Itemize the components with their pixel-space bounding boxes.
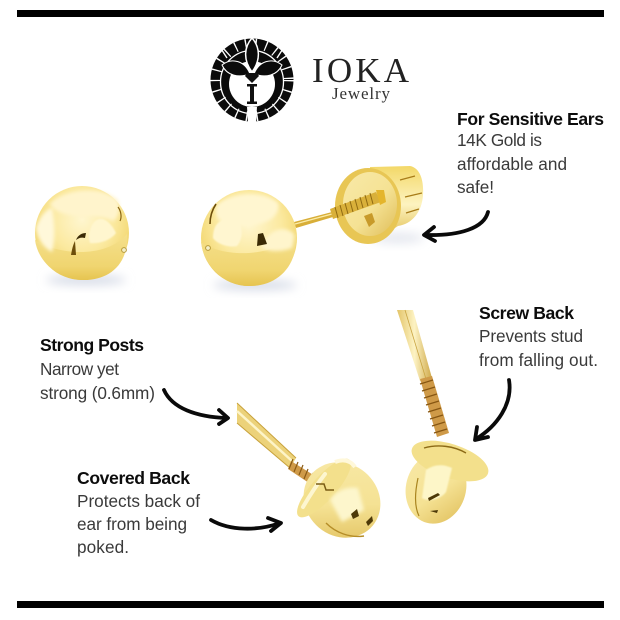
callout: covered back: Protects back of	[77, 491, 200, 511]
arrow to covered back	[211, 518, 281, 531]
callout: for sensitive ears: 14K Gold is	[457, 130, 542, 150]
screw thread	[330, 192, 381, 219]
callout: for sensitive ears: safe!	[457, 177, 494, 197]
top border bar	[17, 10, 604, 17]
back disc	[335, 168, 401, 244]
gold ball stud with screw back, side view	[201, 166, 424, 290]
callout: screw back: Screw Back	[479, 303, 574, 323]
callout: for sensitive ears	[457, 109, 604, 197]
loose screw back with post, lower left	[237, 403, 396, 553]
arrow to screw back disc	[424, 212, 488, 241]
callout: covered back	[77, 468, 200, 557]
callout: strong posts: Strong Posts	[40, 335, 144, 355]
logo wordmark: Jewelry	[332, 84, 390, 103]
ball	[201, 190, 297, 286]
callout: strong posts: Narrow yet	[40, 359, 119, 379]
bottom border bar	[17, 601, 604, 608]
arrow to screw thread	[475, 380, 510, 440]
callout: covered back: Covered Back	[77, 468, 190, 488]
callout: screw back	[479, 303, 598, 370]
callout: for sensitive ears: For Sensitive Ears	[457, 109, 604, 129]
callout: screw back: from falling out.	[479, 350, 598, 370]
post	[294, 212, 333, 228]
callout: screw back: Prevents stud	[479, 326, 583, 346]
callout: strong posts	[40, 335, 155, 403]
callout: covered back: ear from being	[77, 514, 187, 534]
logo emblem	[210, 38, 294, 123]
logo wordmark: IOKA	[312, 51, 410, 90]
arrow to strong post	[164, 390, 228, 424]
loose screw back with post, lower right	[397, 310, 493, 531]
gold ball stud front view	[35, 186, 129, 285]
callout: covered back: poked.	[77, 537, 129, 557]
back cylinder	[370, 166, 423, 243]
callout: for sensitive ears: affordable and	[457, 154, 567, 174]
callout: strong posts: strong (0.6mm)	[40, 383, 155, 403]
